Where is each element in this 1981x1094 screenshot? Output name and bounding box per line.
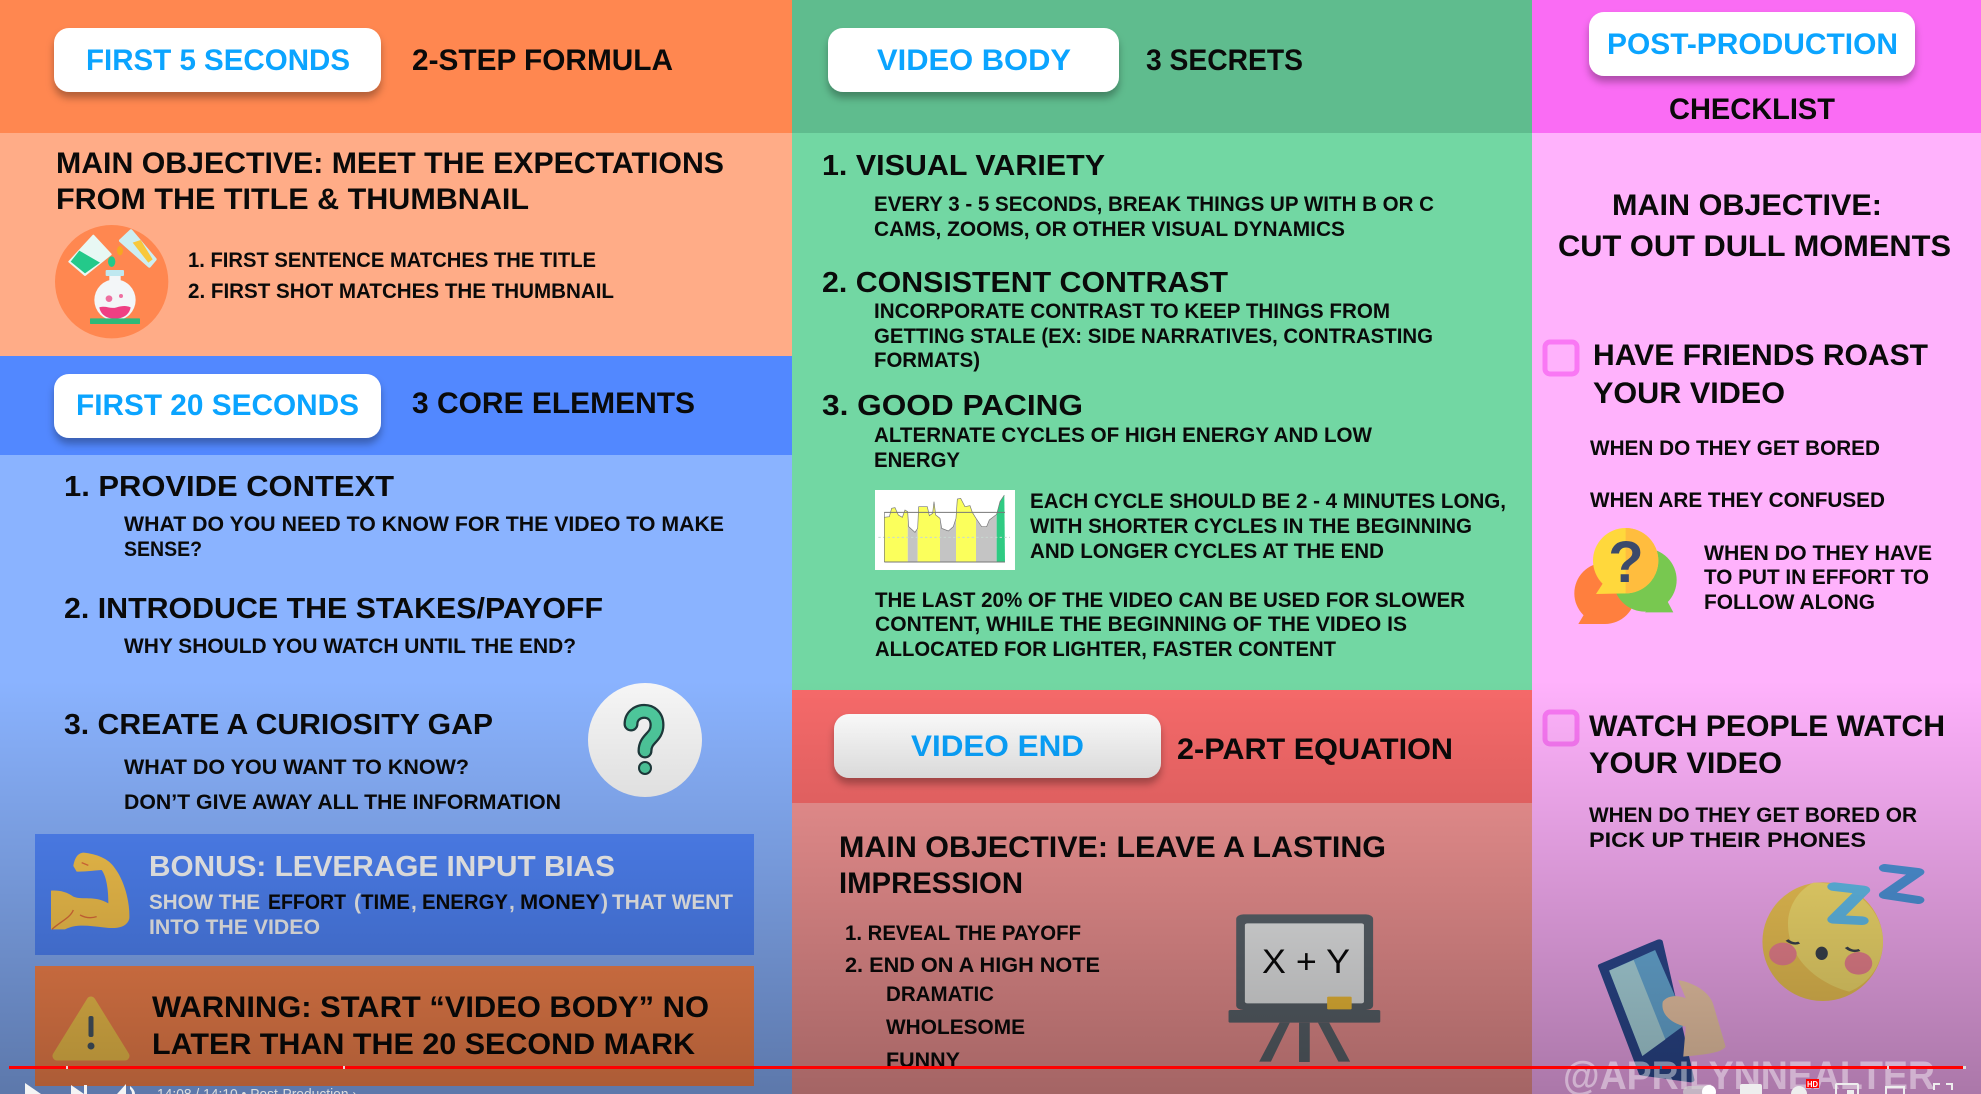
item: stakes payoff: 2. INTRODUCE THE STAKES/PAYOFF [64,593,603,625]
item: curiosity gap: 3. CREATE A CURIOSITY GAP [64,709,493,741]
icon: speech bubbles: ? [1608,530,1644,595]
player controls: right [1683,1079,1952,1094]
checkbox 2 [1545,712,1577,744]
main objective: MAIN OBJECTIVE: MEET THE EXPECTATIONS [56,147,724,180]
item: stakes payoff: WHY SHOULD YOU WATCH UNTIL THE END? [124,635,576,658]
item: provide context: WHAT DO YOU NEED TO KNOW FOR THE VIDEO TO MAKE [124,513,724,536]
callout: bonus: TIME [361,891,410,914]
main objective: FROM THE TITLE & THUMBNAIL [56,183,529,216]
pill: first 5 seconds: FIRST 5 SECONDS [86,44,350,77]
list: video end: WHOLESOME [886,1016,1025,1039]
callout: bonus: BONUS: LEVERAGE INPUT BIAS [149,851,615,883]
callout: bonus: ( [354,891,361,914]
list: video end: 1. REVEAL THE PAYOFF [845,922,1081,945]
pill: video end: VIDEO END [911,730,1084,763]
list: first 5 seconds [188,249,614,303]
item: consistent contrast: FORMATS) [874,349,980,372]
item: good pacing: ENERGY [874,449,960,472]
callout: bonus: EFFORT [268,891,346,914]
item: provide context [64,471,724,561]
panel: post-production [1532,0,1981,1094]
text: cycle length: WITH SHORTER CYCLES IN THE BEGINNING [1030,515,1472,538]
text: last 20 percent [875,589,1465,661]
main objective: IMPRESSION [839,867,1023,900]
main objective: MAIN OBJECTIVE: [1612,189,1882,222]
callout: bonus: , [509,891,515,914]
text: last 20 percent: ALLOCATED FOR LIGHTER, FASTER CONTENT [875,638,1336,661]
text: effort to follow: FOLLOW ALONG [1704,591,1875,614]
item: watch people: YOUR VIDEO [1589,747,1782,780]
callout: bonus: INTO THE VIDEO [149,916,320,939]
main objective [56,147,724,216]
pill: post-production: POST-PRODUCTION [1607,28,1898,61]
item: provide context: SENSE? [124,538,202,561]
progress bar [9,1066,1966,1069]
item: curiosity gap [64,709,561,814]
item: watch people: WHEN DO THEY GET BORED OR [1589,804,1917,827]
item: visual variety: EVERY 3 - 5 SECONDS, BREAK THINGS UP WITH B OR C [874,193,1434,216]
panel: first 5 seconds [0,0,792,356]
item: visual variety: 1. VISUAL VARIETY [822,150,1105,182]
pill: first 20 seconds: FIRST 20 SECONDS [76,389,359,422]
heading: 2-part equation: 2-PART EQUATION [1177,733,1453,766]
list: video end: DRAMATIC [886,983,994,1006]
player controls: left [25,1083,357,1094]
item: consistent contrast: 2. CONSISTENT CONTRAST [822,267,1228,299]
item: provide context: 1. PROVIDE CONTEXT [64,471,394,503]
text: cycle length: AND LONGER CYCLES AT THE END [1030,540,1384,563]
callout: bonus: SHOW THE [149,891,260,914]
main objective [839,831,1386,900]
item: good pacing: ALTERNATE CYCLES OF HIGH ENERGY AND LOW [874,424,1372,447]
icon: chalkboard [1229,914,1380,1062]
item: watch people: WATCH PEOPLE WATCH [1589,710,1945,743]
icon: chalkboard: X + Y [1262,943,1350,981]
icon: chemistry flask [55,225,168,338]
checkbox 1 [1545,342,1577,374]
pill: first 5 seconds [54,28,381,92]
callout: warning: LATER THAN THE 20 SECOND MARK [152,1028,695,1061]
item: friends roast: HAVE FRIENDS ROAST [1593,339,1928,372]
callout: bonus: THAT WENT [612,891,733,914]
list: video end [845,922,1100,1072]
item: watch people [1589,710,1945,852]
callout: bonus: ) [601,891,608,914]
callout: warning: WARNING: START “VIDEO BODY” NO [152,991,709,1024]
main objective [1558,189,1951,263]
callout: bonus [35,834,754,955]
list: video end: 2. END ON A HIGH NOTE [845,954,1100,977]
main objective: CUT OUT DULL MOMENTS [1558,230,1951,263]
heading: 2-step formula: 2-STEP FORMULA [412,44,673,77]
item: good pacing [822,390,1372,472]
item: friends roast: WHEN DO THEY GET BORED [1590,437,1880,460]
heading: 3 core elements: 3 CORE ELEMENTS [412,387,695,420]
icon: speech bubbles [1574,528,1677,624]
callout: warning [35,966,754,1086]
item: consistent contrast [822,267,1433,372]
chart: retention graph [875,490,1015,570]
icon: warning triangle [57,1001,125,1056]
player gradient overlay [0,680,1981,1094]
callout: bonus: MONEY [520,891,600,914]
text: last 20 percent: CONTENT, WHILE THE BEGINNING OF THE VIDEO IS [875,613,1407,636]
heading: checklist: CHECKLIST [1669,93,1835,126]
item: consistent contrast: INCORPORATE CONTRAST TO KEEP THINGS FROM [874,300,1390,323]
icon: question mark [588,683,702,797]
list: video end: FUNNY [886,1049,960,1072]
icon: hand with phone [1601,942,1726,1080]
icon: muscle [51,853,129,929]
callout: bonus: ENERGY [422,891,508,914]
panel: video end [792,690,1532,1094]
pill: first 20 seconds [54,374,381,438]
text: last 20 percent: THE LAST 20% OF THE VIDEO CAN BE USED FOR SLOWER [875,589,1465,612]
text: effort to follow [1704,542,1932,614]
main objective: MAIN OBJECTIVE: LEAVE A LASTING [839,831,1386,864]
heading: 3 secrets: 3 SECRETS [1146,44,1303,77]
text: effort to follow: TO PUT IN EFFORT TO [1704,566,1929,589]
item: good pacing: 3. GOOD PACING [822,390,1083,422]
player controls: right: HD [1807,1080,1818,1089]
text: cycle length [1030,490,1506,563]
text: cycle length: EACH CYCLE SHOULD BE 2 - 4 MINUTES LONG, [1030,490,1506,513]
item: stakes payoff [64,593,603,658]
item: curiosity gap: DON’T GIVE AWAY ALL THE INFORMATION [124,791,561,814]
item: visual variety: CAMS, ZOOMS, OR OTHER VISUAL DYNAMICS [874,218,1345,241]
item: visual variety [822,150,1434,241]
item: consistent contrast: GETTING STALE (EX: SIDE NARRATIVES, CONTRASTING [874,325,1433,348]
pill: video body: VIDEO BODY [877,44,1071,77]
pill: video end [834,714,1161,778]
callout: bonus: , [411,891,417,914]
pill: video body [828,28,1119,92]
panel: first 20 seconds [0,356,792,1094]
list: first 5 seconds: 2. FIRST SHOT MATCHES THE THUMBNAIL [188,280,614,303]
text: effort to follow: WHEN DO THEY HAVE [1704,542,1932,565]
item: friends roast: WHEN ARE THEY CONFUSED [1590,489,1885,512]
list: first 5 seconds: 1. FIRST SENTENCE MATCHES THE TITLE [188,249,596,272]
item: friends roast: YOUR VIDEO [1593,377,1785,410]
item: friends roast [1590,339,1928,512]
panel: video body [792,0,1532,690]
icon: sleeping moon [1762,868,1918,1001]
item: watch people: PICK UP THEIR PHONES [1589,829,1866,852]
item: curiosity gap: WHAT DO YOU WANT TO KNOW? [124,756,469,779]
pill: post-production [1589,12,1915,76]
